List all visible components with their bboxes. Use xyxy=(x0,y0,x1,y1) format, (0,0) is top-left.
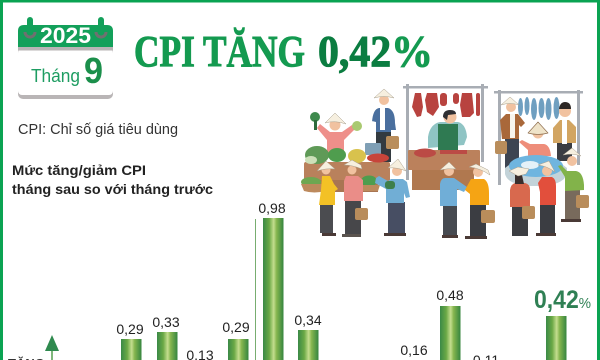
fish tub xyxy=(505,155,567,186)
axis label: increase xyxy=(8,335,59,360)
calendar badge xyxy=(18,17,113,99)
calendar year: 2025 xyxy=(40,23,91,48)
man in orange xyxy=(465,164,495,239)
woman in terracotta xyxy=(509,167,535,236)
calendar month: 9 xyxy=(84,50,103,91)
bars xyxy=(121,218,566,360)
calendar month: Tháng xyxy=(31,65,80,86)
hanging fish xyxy=(518,97,560,120)
vegetable stall xyxy=(301,89,410,237)
fish seller xyxy=(519,122,551,156)
title: CPI TĂNG xyxy=(134,27,305,76)
CPI definition: CPI: Chỉ số giá tiêu dùng xyxy=(18,121,178,138)
chart heading xyxy=(12,162,213,197)
illustration: market scene xyxy=(301,84,589,239)
man in blue xyxy=(440,162,467,238)
highlighted value: 0,42% xyxy=(534,286,591,314)
value labels xyxy=(116,200,499,360)
man in brown jacket xyxy=(495,97,525,170)
man in green xyxy=(558,148,589,222)
divider between years xyxy=(255,219,256,360)
produce and crates xyxy=(301,143,390,192)
value labels: 0,16 xyxy=(400,342,428,358)
title: 0,42% xyxy=(318,27,433,76)
value labels: 0,98 xyxy=(258,200,286,216)
value labels: 0,33 xyxy=(152,314,180,330)
chart heading: tháng sau so với tháng trước xyxy=(12,181,213,197)
woman in red xyxy=(536,161,556,236)
value labels: 0,29 xyxy=(222,319,250,335)
hanging meat xyxy=(412,93,480,117)
man in tan jacket xyxy=(553,102,576,161)
chart heading: Mức tăng/giảm CPI xyxy=(12,162,146,178)
calendar month xyxy=(31,50,103,91)
man in light blue xyxy=(375,159,410,236)
woman in pink xyxy=(342,160,368,237)
value labels: 0,34 xyxy=(294,312,322,328)
standing man in blue jacket xyxy=(372,89,399,162)
butcher xyxy=(428,110,467,151)
value labels: 0,48 xyxy=(436,287,464,303)
meat stall xyxy=(403,84,495,239)
stall seller in pink xyxy=(310,112,362,154)
woman in yellow xyxy=(317,161,338,236)
bar chart xyxy=(8,200,591,360)
butcher table xyxy=(408,148,480,190)
fish stall xyxy=(494,90,589,236)
value labels: 0,29 xyxy=(116,321,144,337)
